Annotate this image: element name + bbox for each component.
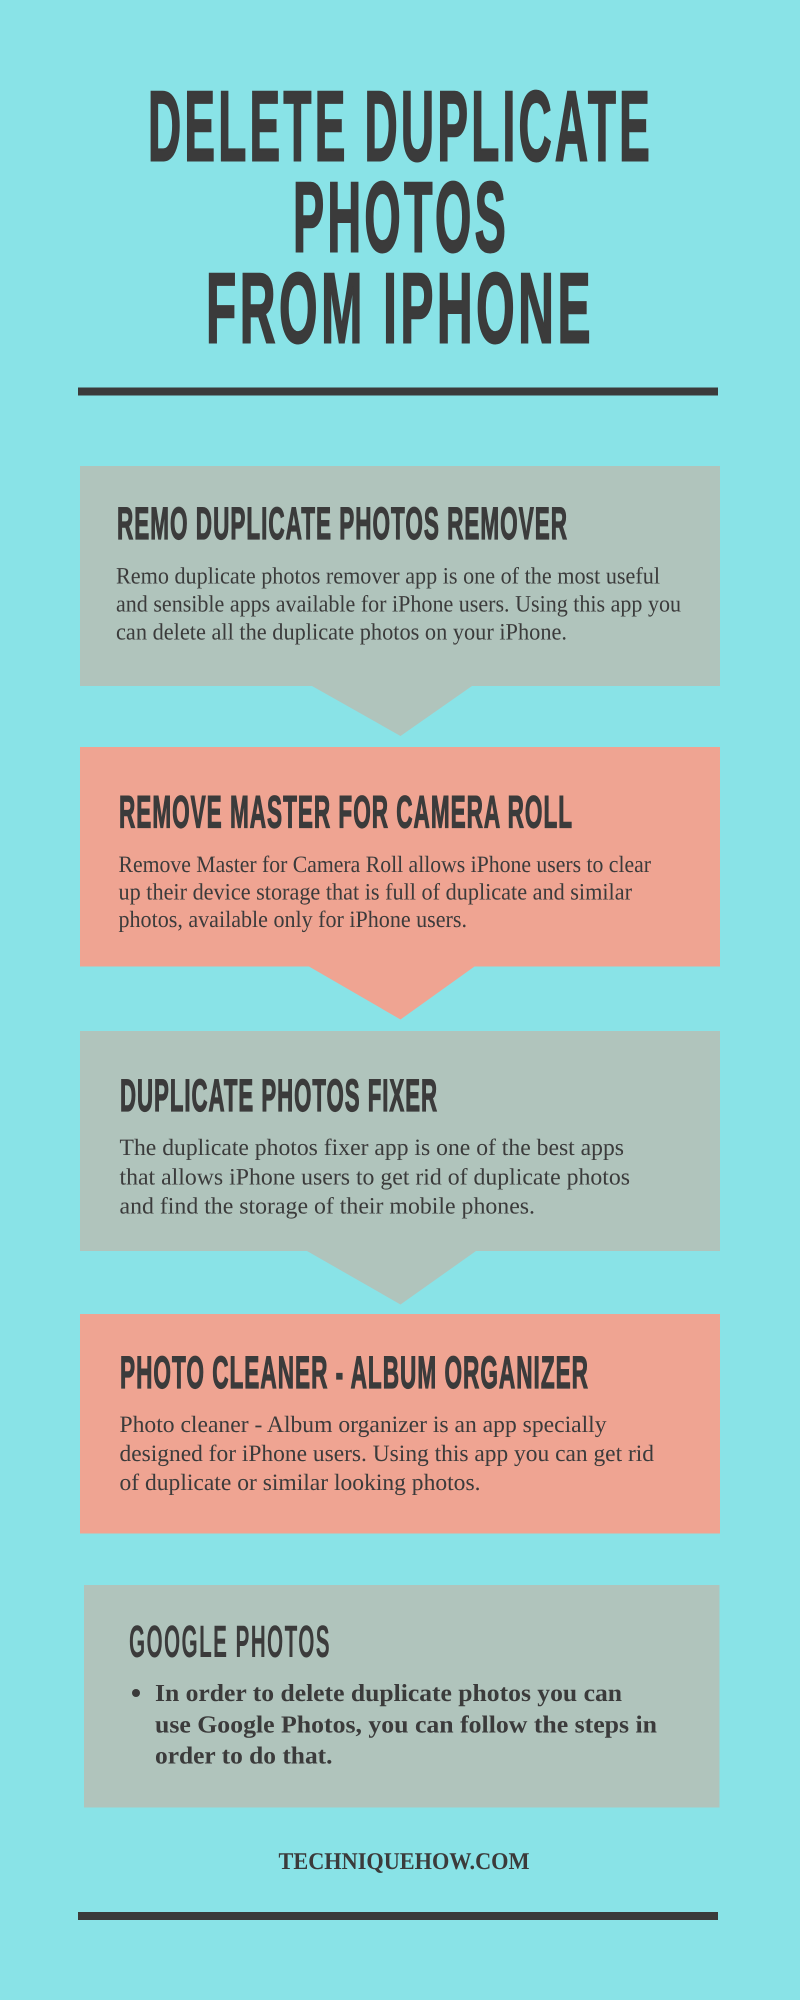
body text: of duplicate or similar looking photos. — [120, 1470, 480, 1496]
body text: that allows iPhone users to get rid of duplicate photos — [120, 1164, 630, 1190]
panel shape with down arrow — [80, 1031, 720, 1304]
footer website text: TECHNIQUEHOW.COM — [278, 1849, 530, 1875]
bullet text: use Google Photos, you can follow the steps in — [155, 1712, 657, 1738]
body text: up their device storage that is full of duplicate and similar — [118, 880, 632, 906]
panel: Google Photos: GOOGLE PHOTOS — [129, 1616, 331, 1667]
body text: Photo cleaner - Album organizer is an app specially — [120, 1412, 607, 1438]
title: PHOTOS — [293, 162, 509, 274]
bottom divider bar — [78, 1912, 718, 1920]
panel: Duplicate Photos Fixer: DUPLICATE PHOTOS FIXER — [120, 1070, 438, 1121]
panel: Remo Duplicate Photos Remover — [80, 466, 720, 736]
panel: Duplicate Photos Fixer — [80, 1031, 720, 1304]
body text: Remove Master for Camera Roll allows iPhone users to clear — [118, 852, 651, 878]
body text: The duplicate photos fixer app is one of the best apps — [120, 1135, 624, 1161]
body text: and sensible apps available for iPhone users. Using this app you — [116, 592, 681, 618]
panel: Photo Cleaner - Album Organizer — [80, 1314, 720, 1534]
body text: designed for iPhone users. Using this app you can get rid — [120, 1441, 654, 1467]
panel shape with down arrow — [80, 747, 720, 1020]
panel shape with down arrow — [80, 466, 720, 736]
title — [148, 70, 653, 364]
panel background — [84, 1585, 720, 1808]
body text — [116, 564, 681, 646]
panel background — [80, 1314, 720, 1534]
bullet — [132, 1689, 140, 1697]
body text — [120, 1135, 630, 1220]
bullet text — [155, 1680, 657, 1770]
body text: Remo duplicate photos remover app is one of the most useful — [116, 564, 660, 590]
body text: and find the storage of their mobile phones. — [120, 1194, 535, 1220]
panel: Remove Master for Camera Roll — [80, 747, 720, 1020]
bullet text: order to do that. — [155, 1742, 332, 1770]
body text — [118, 852, 651, 933]
bullet text: In order to delete duplicate photos you can — [155, 1680, 622, 1707]
panel: Google Photos — [84, 1585, 720, 1808]
body text — [120, 1412, 654, 1496]
body text: can delete all the duplicate photos on your iPhone. — [116, 620, 567, 646]
top divider bar — [78, 388, 718, 396]
body text: photos, available only for iPhone users. — [118, 907, 467, 933]
